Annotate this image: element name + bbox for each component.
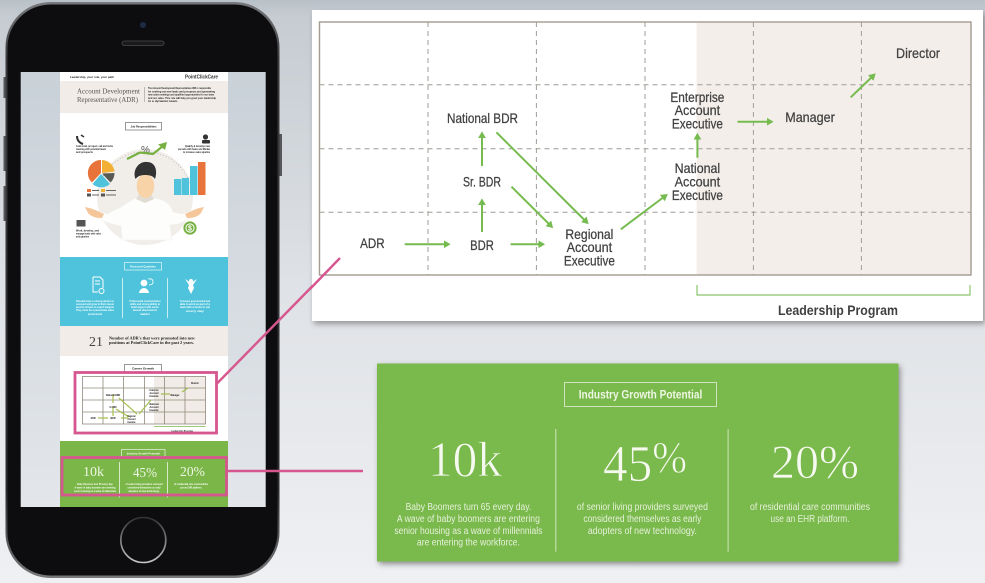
mini label: industry: Industry Growth Potential bbox=[127, 452, 160, 456]
mini chart: Account bbox=[150, 405, 159, 409]
stat text: 45%: adopters of new technology. bbox=[588, 526, 697, 537]
stat text: 10k: senior housing as a wave of millennials bbox=[394, 526, 542, 537]
mini number: 45%: 45% bbox=[133, 466, 157, 481]
stat: 20%: 20% bbox=[771, 436, 859, 489]
mini text: green columns: adopters of new technology. bbox=[128, 489, 160, 493]
mini logo: PointClickCare bbox=[185, 74, 218, 80]
phone side buttons bbox=[4, 77, 282, 221]
mini text: green columns bbox=[74, 482, 208, 493]
mini stat number: 21 bbox=[89, 335, 103, 350]
mini laptop icon bbox=[76, 220, 86, 226]
mini text: green columns: Baby Boomers turn 65 every day. bbox=[77, 482, 113, 486]
node: National BDR: National BDR bbox=[447, 110, 518, 126]
mini text: top right: Qualify & develop new bbox=[185, 144, 211, 148]
illustration: dollar coin bbox=[184, 222, 196, 234]
connector to chart, end bbox=[310, 258, 340, 289]
stat text: 20%: of residential care communities bbox=[750, 502, 870, 513]
stat text: 10k: Baby Boomers turn 65 every day. bbox=[406, 502, 531, 513]
mini chart: Leadership Program bbox=[171, 429, 193, 433]
mini header text: Leadership, your role, your path bbox=[70, 75, 114, 79]
mini text: top left: meeting with potential leads bbox=[76, 147, 106, 151]
phone mockup bbox=[4, 2, 282, 578]
callout: highlight box on chart bbox=[75, 372, 216, 433]
illustration: person bbox=[85, 162, 204, 240]
mini text: bottom left: and pipeline bbox=[76, 234, 89, 238]
stat text: 45%: considered themselves as early bbox=[583, 514, 701, 525]
mini text: bottom left: Work, develop, and bbox=[76, 228, 99, 232]
node: National Account Executive: National bbox=[675, 160, 720, 176]
mini text: blue column 2: level decision bbox=[133, 308, 157, 312]
mini text: top right: pursuits with Sales and Market bbox=[178, 147, 210, 151]
leadership bracket bbox=[697, 285, 970, 295]
panel: career growth chart bbox=[310, 10, 985, 324]
phone camera bbox=[140, 22, 146, 28]
mini text: blue column 3: Focused, goal oriented and bbox=[180, 299, 210, 303]
illustration: dotted arc bbox=[98, 152, 192, 190]
mini intro text: new sales meetings and qualified opportunities for our team bbox=[148, 93, 214, 97]
node: National Account Executive bbox=[672, 160, 723, 203]
mini chart: Account bbox=[128, 417, 136, 421]
mini intro text: and our sales. This role will help you grow your leadership bbox=[148, 96, 216, 100]
illustration: dollar coin: $ bbox=[188, 226, 192, 233]
mini stat text: Number of ADR's that were promoted into new bbox=[109, 336, 195, 340]
mini text: blue column 2: build rapport with senior bbox=[131, 305, 160, 309]
mini panel: stat band bbox=[60, 326, 228, 356]
mini text: green columns: of residential care communities bbox=[174, 482, 208, 486]
mini text: blue column 1: Should have a strong desire to bbox=[76, 299, 114, 303]
mini label: industry bbox=[122, 450, 165, 456]
mini text: blue column 2: skills and strong ability to bbox=[130, 302, 160, 306]
illustration: pie legend bbox=[87, 189, 116, 196]
mini text: blue column 1: professional bbox=[88, 312, 102, 316]
arrows bbox=[405, 74, 874, 244]
mini text: top left: and prospects bbox=[76, 150, 93, 154]
leadership program label: Leadership Program bbox=[778, 302, 898, 318]
phone home button bbox=[121, 518, 166, 562]
mini intro text: The Account Development Representative ADR is responsible bbox=[148, 86, 211, 90]
mini chart: National BDR bbox=[106, 393, 121, 397]
mini icon: speaker bbox=[139, 279, 153, 293]
mini chart: Enterprise bbox=[150, 388, 159, 392]
node: BDR: BDR bbox=[470, 237, 494, 253]
mini text: top right: to increase sales pipeline bbox=[183, 150, 210, 154]
mini chart: ADR bbox=[90, 416, 96, 420]
stat text: 10k: A wave of baby boomers are entering bbox=[397, 514, 540, 525]
mini text: blue column 3: team with a desire to win bbox=[180, 305, 210, 309]
mini label: leadership bbox=[126, 122, 162, 130]
illustration: bar chart bbox=[174, 162, 206, 195]
stat: 10k: 10k bbox=[428, 431, 502, 487]
mini text: top left bbox=[76, 144, 113, 154]
heading: industry growth potential bbox=[564, 382, 716, 406]
phone screen background bbox=[21, 72, 266, 507]
stat text: 10k: are entering the workforce. bbox=[417, 538, 520, 548]
mini text: blue column 1: succeed and grow in their career bbox=[76, 302, 115, 306]
stat text: 20% bbox=[750, 502, 870, 525]
illustration: green arrow bbox=[127, 142, 167, 159]
node: Regional Account Executive bbox=[564, 226, 615, 268]
mini title: Representative (ADR) bbox=[77, 95, 138, 104]
mini intro text: for seeking out new leads and prospects and generating bbox=[148, 89, 215, 93]
node: Enterprise Account Executive: Enterprise bbox=[670, 89, 725, 105]
callout: connector to stats bbox=[226, 470, 363, 472]
callout: connector to chart bbox=[216, 257, 341, 384]
mini chart: Manager bbox=[170, 393, 180, 397]
stat text: 20%: use an EHR platform. bbox=[770, 514, 850, 525]
mini icon: person star bbox=[185, 279, 197, 294]
node: Enterprise Account Executive bbox=[670, 89, 725, 132]
node: Director: Director bbox=[896, 45, 940, 61]
mini stat text bbox=[109, 336, 195, 345]
mini text: green columns: considered themselves as early bbox=[128, 486, 161, 490]
node: Regional Account Executive: Account bbox=[567, 239, 612, 255]
mini text: green columns: senior housing as a wave of millennials bbox=[74, 489, 116, 493]
node: National Account Executive: Executive bbox=[672, 187, 723, 203]
phone body bbox=[6, 2, 280, 578]
mini intro text bbox=[148, 86, 216, 103]
stat text: 45% bbox=[577, 502, 708, 537]
node: National Account Executive: Account bbox=[675, 174, 720, 190]
mini text: blue column 1 bbox=[76, 299, 115, 316]
mini text: blue column 3: able to work as part of a bbox=[180, 302, 210, 306]
mini text: bottom left bbox=[76, 228, 101, 238]
mini chart: Executive bbox=[150, 394, 159, 398]
mini text: bottom left: manage leads with sales bbox=[76, 232, 101, 236]
node: Manager: Manager bbox=[785, 109, 835, 125]
leadership shaded area bbox=[697, 22, 971, 275]
mini text: green columns: use an EHR platform. bbox=[180, 486, 202, 490]
mini text: blue column 2: Professional communication bbox=[130, 299, 161, 303]
mini text: top right bbox=[178, 144, 211, 154]
illustration: pie chart bbox=[88, 160, 115, 187]
mini number: 20%: 20% bbox=[180, 465, 205, 480]
mini text: green columns: of senior living providers surveyed bbox=[126, 482, 163, 486]
mini chart: National bbox=[150, 402, 159, 406]
mini text: blue column 2: makers bbox=[140, 312, 150, 316]
mini text: green columns: A wave of baby boomers are entering bbox=[74, 486, 116, 490]
mini text: blue column 3: every day bbox=[186, 309, 205, 313]
screen content bbox=[60, 72, 228, 507]
mini chart: BDR bbox=[110, 416, 116, 420]
mini stat text: positions at PointClickCare in the past 2 years. bbox=[109, 340, 194, 345]
mini text: blue column 1: and be driven to reach targets bbox=[76, 305, 114, 309]
mini text: blue column 1: They must be a passionate sales bbox=[76, 308, 114, 312]
mini label: blue: Personal Qualities bbox=[130, 264, 156, 268]
node: Enterprise Account Executive: Executive bbox=[672, 116, 723, 132]
mini chart: Sr. BDR bbox=[110, 405, 117, 409]
mini panel: blue bbox=[60, 257, 228, 326]
stat: 45% bbox=[577, 433, 708, 537]
mini person icon bbox=[202, 134, 210, 144]
mini title bbox=[77, 86, 141, 104]
illustration: percent sign: % bbox=[141, 145, 150, 156]
stat text: 10k bbox=[394, 502, 542, 548]
mini icon: certificate bbox=[93, 277, 104, 294]
mini chart: Account bbox=[150, 391, 159, 395]
illustration: backdrop circle bbox=[97, 149, 193, 245]
mini text: blue column 2 bbox=[130, 299, 161, 316]
stat: 10k bbox=[394, 431, 542, 548]
mini text: blue column 3 bbox=[180, 299, 210, 313]
mini intro text: in a dynamic team. bbox=[148, 99, 178, 103]
content column bbox=[60, 72, 228, 507]
mini label: blue bbox=[124, 262, 162, 270]
panel: industry growth potential bbox=[377, 364, 900, 564]
chart frame bbox=[320, 22, 971, 275]
mini title: Account Development bbox=[77, 86, 141, 96]
mini chart bbox=[82, 376, 206, 433]
node: Sr. BDR: Sr. BDR bbox=[463, 174, 501, 190]
stat: 45%: 45 bbox=[603, 436, 655, 493]
mini text: top left: Cold email, prospect, call and invite bbox=[76, 144, 113, 148]
mini chart: Regional bbox=[128, 414, 136, 418]
node: Enterprise Account Executive: Account bbox=[675, 102, 720, 118]
node: Regional Account Executive: Executive bbox=[564, 252, 615, 268]
node: Regional Account Executive: Regional bbox=[565, 226, 613, 242]
phone speaker bbox=[122, 41, 164, 46]
mini panel: green bbox=[60, 441, 228, 507]
mini chart: Director bbox=[191, 381, 200, 385]
mini chart: Executive bbox=[128, 420, 136, 424]
mini phone icon bbox=[77, 135, 84, 144]
mini title band bbox=[60, 81, 228, 113]
callout: highlight box on stats bbox=[62, 458, 226, 495]
mini label: career growth bbox=[124, 364, 162, 372]
heading: industry growth potential: Industry Growth Potential bbox=[579, 388, 702, 402]
stat: 45%: % bbox=[652, 433, 687, 482]
stat: 20% bbox=[750, 436, 870, 525]
mini number: 10k: 10k bbox=[83, 465, 104, 480]
mini label: career growth: Career Growth bbox=[132, 366, 154, 370]
mini chart: Executive bbox=[150, 408, 159, 412]
stat text: 45%: of senior living providers surveyed bbox=[577, 502, 708, 513]
node: ADR: ADR bbox=[360, 235, 385, 251]
mini label: leadership: Job Responsibilities bbox=[130, 124, 157, 128]
